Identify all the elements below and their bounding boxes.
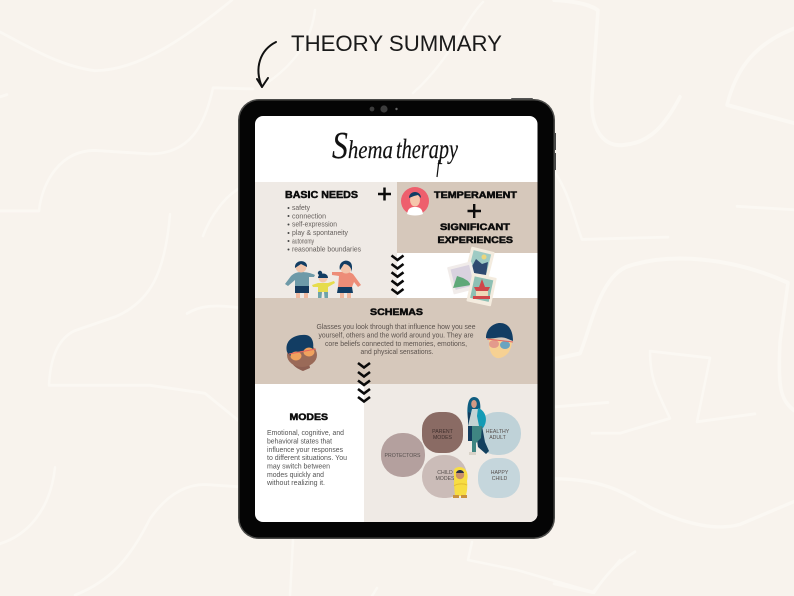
text: schemas description: yourself, others and the world around you. They are xyxy=(318,330,474,340)
heading: basic needs: BASIC NEEDS xyxy=(285,190,358,201)
text: modes description xyxy=(266,428,347,487)
arrow pointing to tablet xyxy=(257,42,276,87)
plus sign between needs and temperament xyxy=(378,188,391,200)
panel: modes text xyxy=(266,412,347,487)
icon: family of three xyxy=(285,261,361,303)
figure: standing adult xyxy=(467,397,489,455)
blob: parent modes: PARENT xyxy=(432,429,454,435)
small child xyxy=(312,281,335,292)
chevrons: lower column xyxy=(358,363,370,402)
label: significant experiences: SIGNIFICANT xyxy=(440,222,510,233)
blob: protectors xyxy=(381,433,425,477)
panel: schemas xyxy=(255,298,538,384)
icon: stack of photos xyxy=(447,246,497,306)
list: basic needs: reasonable boundaries xyxy=(292,245,361,254)
blob: happy child xyxy=(478,458,520,498)
text: modes description: without realizing it. xyxy=(266,478,325,487)
list: basic needs xyxy=(288,203,361,254)
text: schemas description: Glasses you look through that influence how you see xyxy=(316,322,476,331)
text: schemas description xyxy=(316,322,476,356)
blob: child modes: CHILD xyxy=(437,470,453,476)
heading: modes: MODES xyxy=(290,412,328,423)
label: significant experiences: EXPERIENCES xyxy=(438,235,513,246)
icon: woman with sunglasses xyxy=(486,323,513,358)
list: basic needs: safety xyxy=(292,203,310,212)
text: schemas description: core beliefs connected to memories, emotions, xyxy=(325,339,467,348)
text: modes description: Emotional, cognitive, and xyxy=(267,428,344,437)
label: temperament: TEMPERAMENT xyxy=(434,190,517,201)
adult xyxy=(332,272,361,287)
blob: healthy adult xyxy=(476,412,521,455)
chevrons: upper column xyxy=(392,256,404,294)
blob: parent modes xyxy=(422,412,463,453)
list: basic needs: autonomy xyxy=(292,236,314,245)
blob: child modes: MODES xyxy=(435,476,455,482)
icon: face avatar xyxy=(401,187,429,216)
list: basic needs: self-expression xyxy=(292,220,337,229)
title: Shema therapy: therapy xyxy=(396,134,458,164)
blob: protectors: PROTECTORS xyxy=(385,453,421,459)
blob: healthy adult: ADULT xyxy=(489,435,507,441)
panel: temperament and experiences xyxy=(397,182,538,253)
blob: happy child: CHILD xyxy=(492,476,508,482)
title: Shema therapy xyxy=(332,125,458,177)
blob: happy child: HAPPY xyxy=(491,470,509,476)
text: modes description: modes quickly and xyxy=(267,470,324,479)
blob: child modes xyxy=(422,455,467,498)
icon: man with sunglasses xyxy=(286,335,317,371)
label: significant experiences xyxy=(438,222,513,246)
text: modes description: influence your responses xyxy=(267,445,343,454)
blob: healthy adult: HEALTHY xyxy=(486,429,510,435)
text: modes description: may switch between xyxy=(267,462,330,470)
list: basic needs: connection xyxy=(292,211,326,220)
figure: child in yellow raincoat xyxy=(453,467,468,498)
blob: parent modes: MODES xyxy=(433,435,453,441)
text: schemas description: and physical sensations. xyxy=(360,347,434,356)
plus sign xyxy=(468,204,481,218)
tablet device xyxy=(238,98,556,539)
panel: basic needs xyxy=(255,182,397,303)
heading: schemas: SCHEMAS xyxy=(370,307,423,318)
list: basic needs: play & spontaneity xyxy=(292,228,348,237)
text: modes description: to different situations. You xyxy=(267,453,347,462)
text: modes description: behavioral states that xyxy=(267,436,333,446)
heading: theory summary: THEORY SUMMARY xyxy=(291,31,502,56)
panel: modes diagram xyxy=(364,384,538,522)
title: Shema therapy: Shema xyxy=(332,125,393,167)
left child xyxy=(285,272,315,287)
